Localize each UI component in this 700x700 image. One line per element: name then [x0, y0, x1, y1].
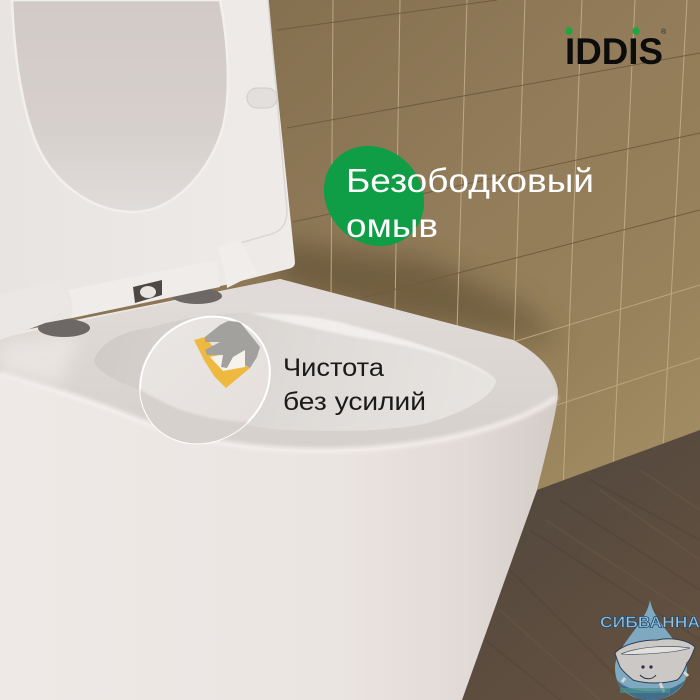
caption: Чистота: [283, 354, 384, 382]
background: tiled wall: [0, 0, 700, 500]
logo IDDIS: IDDIS: [565, 31, 663, 72]
bathtub with face: [615, 639, 695, 683]
floor: [450, 430, 700, 700]
toilet body: [0, 279, 558, 700]
hinge metal badge: [133, 280, 162, 303]
seat inner recess: [12, 0, 228, 212]
bowl lip highlight: [250, 313, 496, 380]
logo IDDIS: ®: [661, 28, 667, 36]
toilet seat lid: [0, 0, 295, 340]
seat hinges: [38, 288, 222, 337]
heading: Безободковый: [346, 162, 594, 199]
caption: без усилий: [283, 388, 426, 416]
green circle: [303, 125, 445, 267]
right hinge cover: [217, 240, 257, 288]
water drop: [615, 600, 687, 700]
foam: [210, 350, 245, 371]
rim highlight: [0, 373, 557, 450]
left hinge cover: [0, 280, 70, 340]
heading second line: омыв: [346, 207, 438, 244]
small bump on seat: [247, 88, 277, 108]
bowl opening: [94, 313, 496, 431]
glove: [205, 321, 260, 368]
seat frame contour: [240, 0, 287, 243]
watermark logo: Сибванна: СИБВАННА: [600, 614, 700, 632]
circle inset: sponge and glove: [139, 316, 271, 444]
glossy left rim: [0, 332, 80, 385]
sponge: [194, 337, 250, 388]
hinge bar: [68, 260, 220, 318]
caption: [283, 354, 426, 416]
watermark logo: Сибванна: [600, 600, 700, 700]
rim surface: [0, 279, 557, 450]
